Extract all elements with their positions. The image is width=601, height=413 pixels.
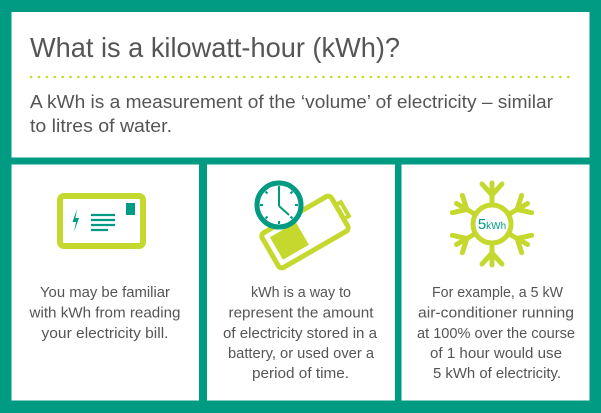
text: bill (28, 284, 180, 342)
text: battery: represent the amount (228, 304, 374, 322)
panel: air-conditioner (402, 164, 590, 400)
text: air-conditioner: For example, a 5 kW (432, 284, 564, 301)
text: battery: of electricity stored in a (223, 325, 378, 342)
intro text (30, 92, 553, 136)
icon: snowflake: 5kWh (478, 216, 506, 233)
icon: battery (260, 192, 355, 269)
panel: intro (12, 12, 590, 158)
icon: bill envelope (60, 196, 143, 246)
text: bill: You may be familiar (40, 284, 170, 301)
text: air-conditioner: at 100% over the course (417, 325, 575, 342)
text: air-conditioner: of 1 hour would use (430, 345, 562, 362)
text: battery: kWh is a way to (251, 284, 351, 301)
intro text: to litres of water. (30, 116, 172, 136)
text: air-conditioner (417, 284, 575, 382)
panel: bill (12, 164, 199, 400)
icon: clock (257, 183, 301, 227)
text: battery: period of time. (252, 365, 349, 382)
title: What is a kilowatt-hour (kWh)? (30, 32, 400, 63)
text: battery (223, 284, 378, 382)
text: air-conditioner: 5 kWh of electricity. (433, 365, 561, 382)
intro text: A kWh is a measurement of the ‘volume’ of electricity – similar (30, 92, 553, 112)
text: air-conditioner: air-conditioner running (418, 304, 574, 322)
icon: snowflake (451, 183, 533, 265)
panel: battery (207, 164, 395, 400)
text: bill: with kWh from reading (28, 304, 180, 322)
text: bill: your electricity bill. (42, 325, 168, 342)
text: battery: battery, or used over a (228, 345, 375, 362)
